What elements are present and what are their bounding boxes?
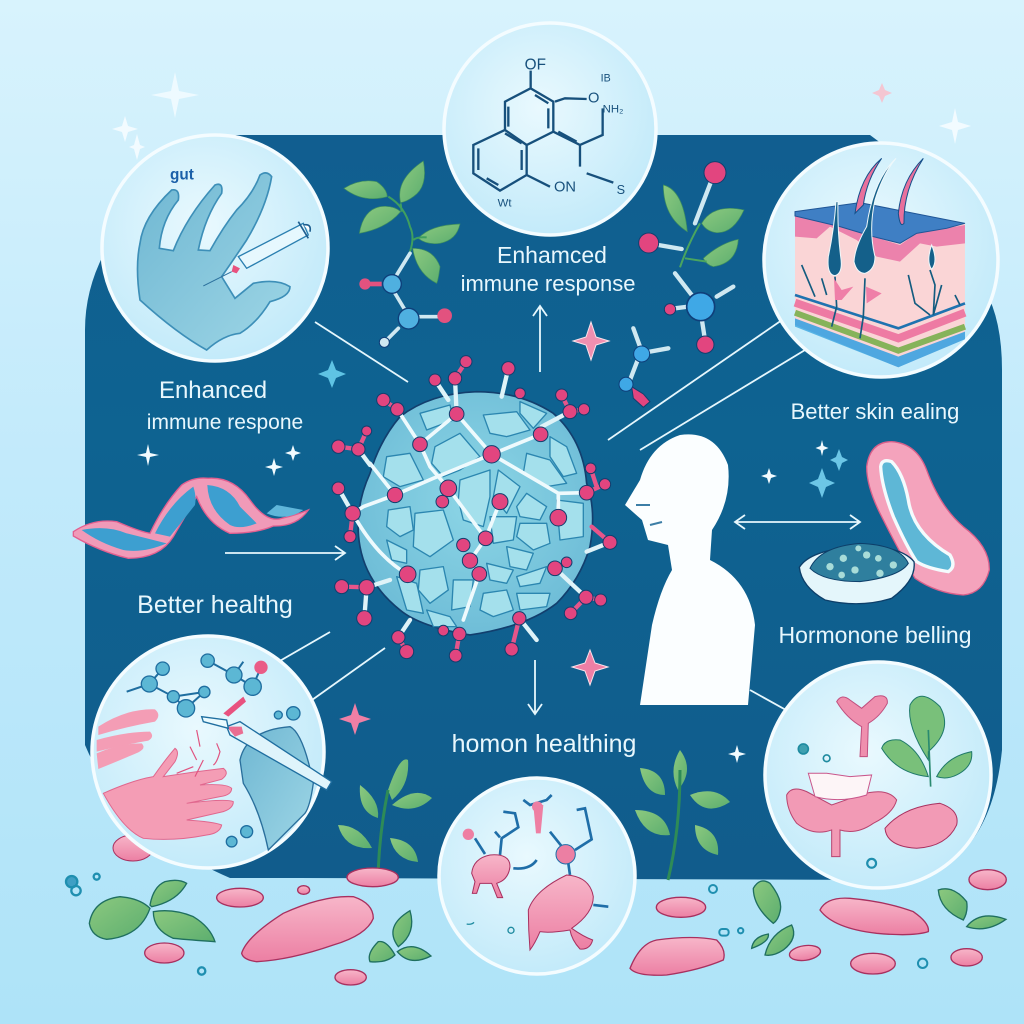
circle: hands and pen — [92, 636, 332, 868]
circle: pink glands and leaves — [765, 662, 991, 888]
circle: chemical structure: Wt — [498, 198, 512, 210]
icon: syringe — [203, 222, 310, 286]
circle: skin cross section — [764, 143, 998, 377]
circle: chemical structure: ON — [554, 179, 576, 195]
plant and molecules: top right — [619, 162, 744, 407]
ground items right — [630, 859, 1006, 975]
circle: chemical structure: S — [617, 183, 625, 197]
human silhouette — [625, 434, 755, 705]
label: gut: gut — [170, 166, 194, 183]
circle: chemical structure: NH₂ — [603, 104, 623, 116]
label: better health: Better healthg — [137, 591, 293, 619]
pink pill behind circle — [113, 835, 153, 861]
circle: chemical structure: O — [588, 91, 599, 107]
label: enhanced left: Enhanced — [159, 377, 267, 404]
ground items left — [66, 868, 431, 985]
connector lines and arrows — [225, 306, 860, 715]
central virus particle — [332, 356, 617, 662]
left ribbon — [73, 478, 308, 558]
circle: two pink figures — [439, 778, 635, 974]
circle: chemical structure: IB — [601, 73, 611, 85]
central dark panel — [85, 135, 1002, 880]
circle: chemical structure: OF — [525, 56, 546, 73]
label: homon: homon healthing — [452, 730, 636, 758]
label: hormone: Hormonone belling — [778, 622, 972, 648]
label: better skin: Better skin ealing — [791, 399, 959, 424]
plant: bottom left — [338, 759, 432, 885]
pink and blue sparkles — [318, 83, 892, 735]
plant and molecule: top left — [344, 161, 460, 347]
plant: bottom right — [635, 750, 730, 880]
label: enhanced top: Enhamced — [497, 242, 607, 268]
label: immune response left: immune respone — [147, 411, 303, 434]
label: immune response top: immune response — [461, 271, 635, 296]
decorative sparkles — [112, 72, 971, 763]
icon: pink organ and bowl — [799, 442, 989, 604]
heading labels — [137, 242, 972, 758]
circle: chemical structure — [444, 23, 656, 235]
icon: pen — [202, 697, 332, 790]
circle: hand and syringe — [102, 135, 328, 361]
